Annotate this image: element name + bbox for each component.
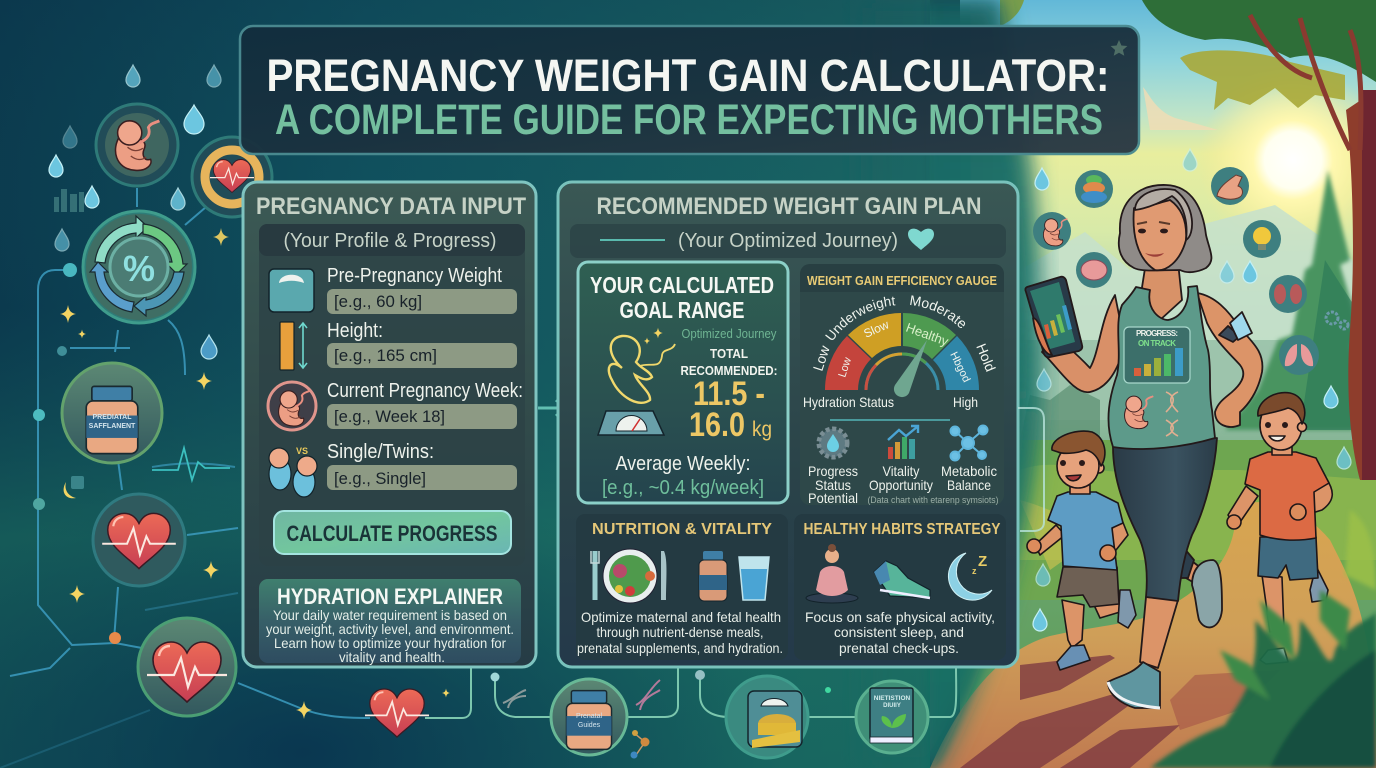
facial features: [1137, 222, 1170, 257]
icon: brain: [1076, 252, 1112, 288]
text block: hydration explainer: [259, 579, 521, 665]
icon: fetus bubble: [1033, 212, 1071, 250]
icon: molecule small: [630, 730, 650, 758]
icon: lungs: [1279, 335, 1319, 375]
icon: dna left: [503, 690, 526, 708]
icon: prenatal supplement: [62, 363, 162, 463]
gauge labels: Hold: [973, 341, 999, 374]
sub-panel: profile and inputs: [259, 224, 525, 566]
icon: kidneys: [1269, 275, 1307, 313]
bottom icons: [503, 676, 928, 758]
icon: goal scale: [598, 411, 664, 435]
gauge chart: High: [953, 394, 978, 410]
sun: [1198, 65, 1376, 255]
shorts: [1057, 567, 1119, 607]
illustration: boy in blue: [1027, 431, 1136, 670]
hands: [1227, 515, 1241, 529]
field: single or twins: [327, 441, 517, 490]
belly fetus and dna: [1125, 396, 1153, 429]
scenic background: [930, 0, 1376, 768]
icon: heart pulse circle: [93, 494, 185, 586]
icon: moon and z: z: [972, 566, 977, 576]
field: pregnancy week: [e.g., Week 18]: [334, 407, 445, 426]
icon: bottom supplement: Guides: [578, 722, 601, 729]
icon: light bulb: [1243, 220, 1281, 258]
gauge labels: [810, 295, 999, 384]
field: pre-pregnancy weight: Pre-Pregnancy Weight: [327, 265, 502, 287]
heading: data input: PREGNANCY DATA INPUT: [256, 193, 526, 220]
icon: supplement bottle: [699, 551, 727, 601]
title: PREGNANCY WEIGHT GAIN CALCULATOR:: [266, 50, 1110, 101]
icon: molecule: [950, 426, 988, 460]
heading: plan: RECOMMENDED WEIGHT GAIN PLAN: [596, 193, 982, 220]
front shoe: [1108, 662, 1160, 708]
card: nutrition and vitality: prenatal supplements, and hydration.: [577, 640, 783, 656]
tank top: [1108, 286, 1215, 449]
icon: plate with cutlery: [591, 549, 666, 603]
trunk at right: [1346, 90, 1376, 480]
icon: dna: [636, 680, 660, 710]
progress display on shirt: ON TRACK: [1138, 339, 1176, 348]
icon: percent cycle: [83, 211, 195, 323]
hair strands: [1135, 189, 1192, 240]
field: pre-pregnancy weight: [327, 265, 517, 314]
field: height: [e.g., 165 cm]: [334, 346, 437, 365]
gauge labels: Healthy: [904, 320, 951, 349]
button: calculate progress: [274, 511, 511, 554]
right arm: [1197, 293, 1262, 427]
neck: [1140, 262, 1182, 320]
icon: prenatal yoga: [806, 544, 858, 603]
field: pre-pregnancy weight: [e.g., 60 kg]: [334, 292, 422, 311]
icon: twins: VS: [296, 446, 308, 456]
panel: pregnancy data input: [243, 182, 536, 667]
card: calculated goal range: GOAL RANGE: [620, 297, 744, 323]
pine tree: [1225, 170, 1376, 430]
head: [1272, 445, 1292, 455]
icon: prenatal supplement: PREDIATAL: [92, 414, 132, 421]
text block: hydration explainer: Learn how to optimize your hydration for: [274, 635, 506, 651]
gauge captions: Vitality: [882, 463, 920, 479]
text block: hydration explainer: HYDRATION EXPLAINER: [277, 584, 503, 609]
gauge captions: Opportunity: [869, 477, 933, 493]
card: healthy habits strategy: Focus on safe physical activity,: [805, 609, 995, 625]
icon: fetus circle: [96, 104, 178, 186]
icon: water glass: [739, 557, 769, 600]
connector bracket: [1018, 408, 1044, 531]
text block: hydration explainer: Your daily water requirement is based on: [273, 607, 507, 623]
arms: [1228, 486, 1258, 528]
floating body icons: [1033, 167, 1348, 375]
card: healthy habits strategy: [794, 514, 1006, 660]
card: nutrition and vitality: NUTRITION & VITALITY: [592, 521, 772, 538]
mountains: [1020, 205, 1376, 420]
shorts: [1258, 537, 1318, 580]
back leg shoe: [1310, 566, 1328, 602]
icon: percent cycle: %: [123, 248, 155, 289]
card: calculated goal range: TOTAL: [710, 346, 748, 361]
gauge labels: Low: [810, 343, 833, 373]
back hair: [1119, 185, 1211, 272]
gauge captions: [808, 463, 998, 506]
field: pregnancy week: Current Pregnancy Week:: [327, 380, 523, 402]
field: single or twins: Single/Twins:: [327, 441, 434, 463]
icon: vitality chart: [888, 426, 918, 459]
grass: [960, 440, 1376, 600]
gauge captions: Metabolic: [941, 463, 997, 479]
cloud: [1143, 87, 1218, 130]
left icons: [62, 104, 429, 737]
title: [240, 26, 1139, 154]
icon: ruler: [280, 322, 307, 370]
icon: nutrition book: DIUIIY: [883, 703, 901, 709]
hands: [1027, 539, 1041, 553]
icon: twins: [269, 446, 317, 497]
card: nutrition and vitality: [576, 514, 788, 660]
icon: bottom supplement: Prenatal: [576, 713, 602, 720]
subheading: optimized journey: [570, 224, 1006, 258]
card: calculated goal range: RECOMMENDED:: [680, 363, 778, 378]
gauge labels: Low: [836, 356, 854, 379]
illustration: foreground foliage: [1150, 510, 1376, 768]
arrow: input to plan: [538, 400, 565, 416]
icon: moon and z: Z: [978, 553, 987, 570]
field: height: Height:: [327, 320, 383, 342]
back knee cuff: [1178, 548, 1194, 578]
card: calculated goal range: Optimized Journey: [682, 326, 777, 341]
card: calculated goal range: Average Weekly:: [616, 453, 750, 475]
card: calculated goal range: 11.5 -: [693, 375, 765, 413]
illustration: running mother: [1025, 185, 1262, 708]
front leg: [1062, 600, 1084, 648]
card: calculated goal range: YOUR CALCULATED: [590, 272, 774, 298]
icon: gears: [1326, 312, 1348, 329]
icon: glowing fetus: [609, 336, 675, 403]
face: [1134, 200, 1186, 270]
t-shirt: [1048, 492, 1123, 570]
gauge labels: Slow: [862, 317, 891, 341]
leggings: [1113, 438, 1217, 601]
icon: running shoe: [874, 561, 930, 598]
gauge labels: Hbgod: [947, 350, 972, 384]
head: [1070, 482, 1090, 494]
card: calculated goal range: [578, 262, 788, 503]
card: nutrition and vitality: Optimize maternal and fetal health: [581, 609, 781, 625]
subheading: optimized journey: (Your Optimized Journey): [678, 230, 898, 252]
text block: hydration explainer: vitality and health.: [339, 649, 445, 665]
armband: [1219, 326, 1240, 342]
top foliage: [1180, 50, 1345, 110]
gauge captions: Status: [815, 477, 851, 493]
gauge captions: Progress: [808, 463, 858, 479]
text block: hydration explainer: your weight, activity level, and environment.: [266, 621, 514, 637]
progress display on shirt: [1124, 327, 1190, 383]
button: calculate progress: CALCULATE PROGRESS: [286, 521, 498, 546]
arms: [1035, 525, 1065, 555]
gauge chart: Hydration Status: [803, 394, 894, 410]
card: healthy habits strategy: HEALTHY HABITS STRATEGY: [804, 521, 1001, 538]
illustration: boy in orange: [1227, 393, 1332, 664]
gauge labels: Underweight: [825, 296, 896, 340]
card: nutrition and vitality: through nutrient-dense meals,: [596, 624, 764, 640]
panel: recommended weight gain plan: [556, 180, 1020, 668]
dirt path: [930, 502, 1376, 768]
icon: heart pulse lower circle: [138, 618, 236, 716]
icon: scale and tape: [726, 676, 808, 758]
field: pregnancy week: [327, 380, 523, 429]
progress display on shirt: PROGRESS:: [1136, 329, 1178, 338]
gauge labels: Moderate: [910, 295, 966, 328]
card: weight gain efficiency gauge: [800, 264, 1004, 506]
left arm: [1042, 295, 1125, 392]
icon: moon and z: [948, 553, 992, 600]
gauge captions: Potential: [808, 490, 858, 506]
sub-panel: profile and inputs: (Your Profile & Progress): [284, 230, 496, 252]
card: weight gain efficiency gauge: WEIGHT GAIN EFFICIENCY GAUGE: [807, 273, 997, 288]
data bars decoration: [54, 189, 84, 212]
icon: heart gauge circle: [192, 137, 272, 217]
icon: gear with drop: [819, 429, 847, 457]
field: single or twins: [e.g., Single]: [334, 469, 426, 488]
icon: muscle: [1211, 167, 1249, 205]
field: height: [327, 320, 517, 368]
icon: nutrition book: NIETISTION: [874, 695, 911, 702]
front leg: [1262, 575, 1284, 632]
icon: nutrition book: [856, 681, 928, 753]
icon: bottom heart: [365, 689, 429, 737]
card: calculated goal range: kg: [752, 418, 772, 441]
icon: prenatal supplement: SAFFLANENT: [89, 423, 136, 430]
path shadows: [960, 655, 1180, 768]
icon: scale: [269, 269, 314, 312]
card: healthy habits strategy: prenatal check-ups.: [839, 640, 959, 656]
gauge captions: (Data chart with etarenp symsiots): [868, 495, 998, 506]
icon: bottom supplement: [551, 679, 627, 755]
icon: fetus week: [268, 382, 316, 430]
back leg: [1094, 598, 1124, 618]
back calf: [1186, 558, 1206, 590]
phone: [1025, 277, 1082, 357]
back shoe: [1192, 560, 1222, 627]
card: healthy habits strategy: consistent sleep, and: [834, 624, 964, 640]
title: A COMPLETE GUIDE FOR EXPECTING MOTHERS: [275, 96, 1103, 144]
card: calculated goal range: 16.0: [689, 406, 745, 444]
network lines: [0, 188, 370, 768]
gauge chart: [803, 295, 999, 410]
icon: stacked layers: [1075, 170, 1113, 208]
card: calculated goal range: [e.g., ~0.4 kg/week]: [602, 477, 764, 499]
front calf: [1140, 597, 1178, 668]
gauge captions: Balance: [947, 477, 991, 493]
t-shirt: [1245, 452, 1329, 540]
